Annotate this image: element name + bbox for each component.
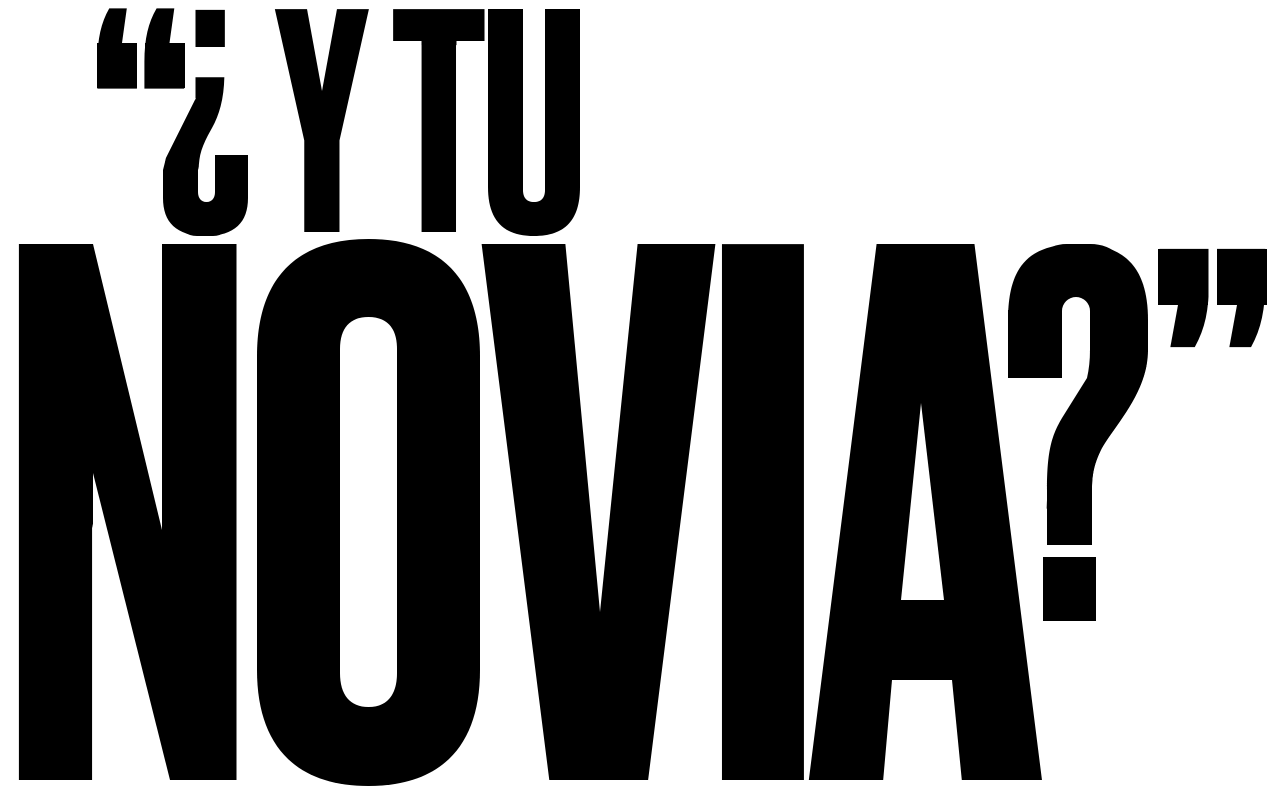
letter U (488, 9, 580, 236)
question mark: ? (1009, 132, 1148, 736)
heading line: NOVIA? (18, 239, 1267, 786)
letter O (257, 239, 480, 786)
closing quote mark: ” (1145, 173, 1279, 562)
heading line: ¿Y TU (97, 8, 580, 236)
